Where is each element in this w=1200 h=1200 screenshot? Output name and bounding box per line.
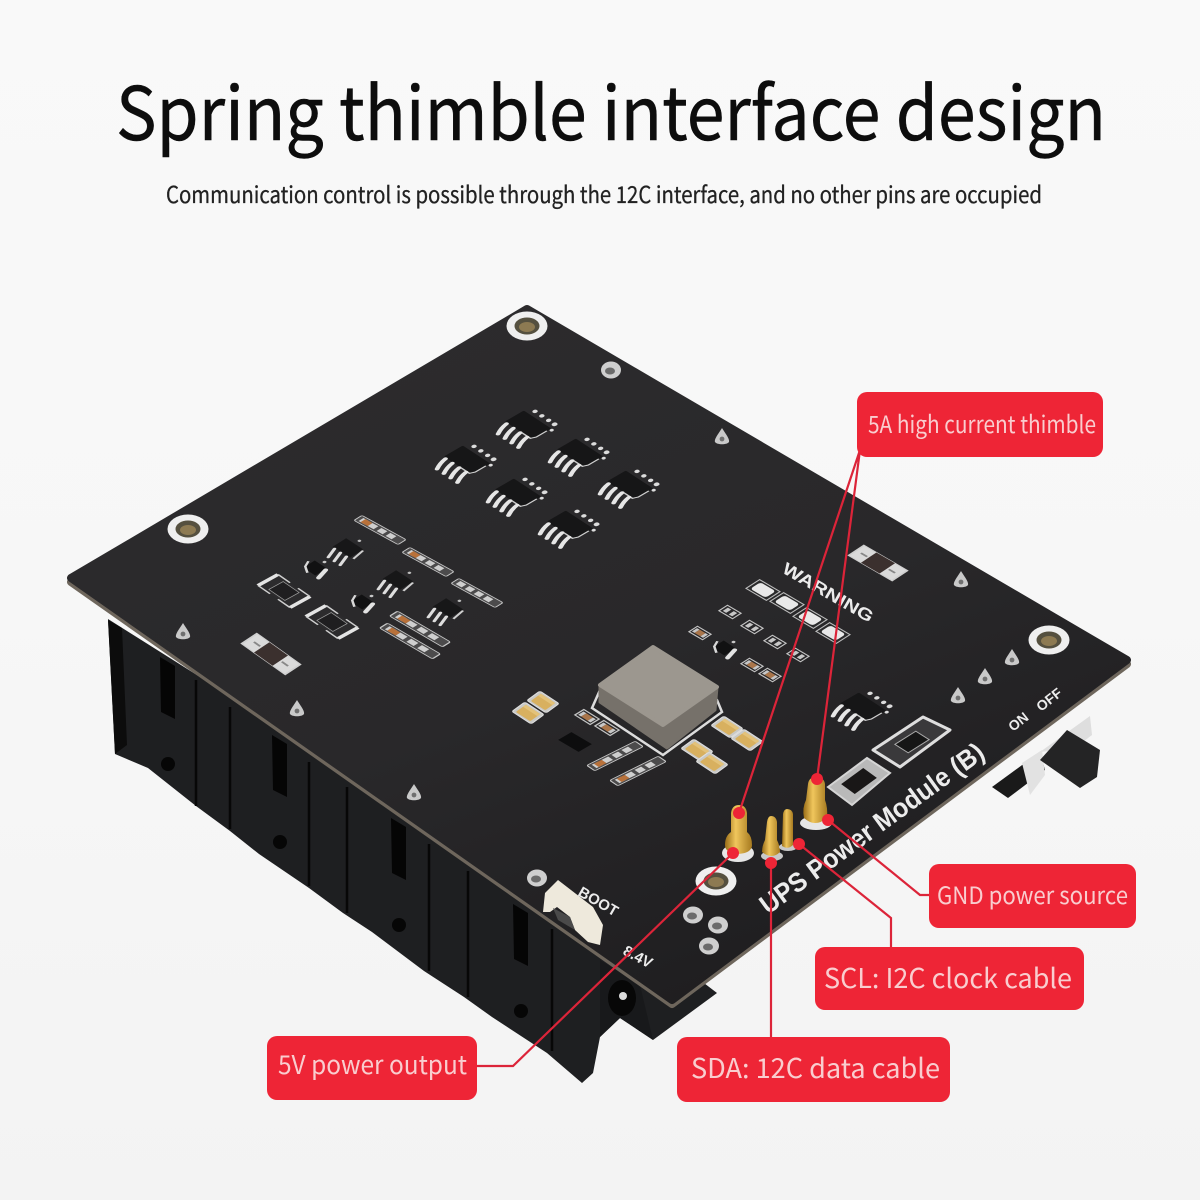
subtitle: Communication control is possible through the 12C interface, and no other pins are occupied	[166, 176, 1042, 210]
SOIC chip array	[430, 406, 897, 731]
callout: 5V power output: 5V power output	[278, 1045, 467, 1082]
warning footprints	[689, 545, 907, 682]
battery holder	[108, 619, 717, 1083]
left small components	[242, 515, 503, 675]
leader lines	[733, 450, 860, 819]
silkscreen labels: 8.4V	[620, 943, 655, 972]
inductor	[592, 647, 722, 755]
callout: SCL I2C clock cable	[793, 838, 1084, 1010]
mounting holes	[168, 312, 1070, 896]
solder points	[176, 362, 1019, 954]
callout: GND power source: GND power source	[937, 876, 1128, 911]
callout: 5A high current thimble: 5A high current thimble	[868, 405, 1096, 440]
silkscreen labels: ON	[1005, 709, 1031, 734]
silkscreen labels: UPS Power Module (B)	[754, 737, 990, 920]
silkscreen labels	[575, 559, 1065, 972]
callout: GND power source	[822, 814, 1136, 928]
DC power jack	[600, 960, 653, 1040]
callout: 5A high current thimble	[733, 392, 1103, 819]
product: UPS power module	[71, 309, 1127, 1083]
silkscreen labels: WARNING	[779, 559, 877, 626]
title: Spring thimble interface design	[116, 55, 1106, 162]
callout: SDA 12C data cable	[677, 857, 950, 1102]
silkscreen labels: BOOT	[575, 884, 621, 920]
capacitors and small parts near inductor	[512, 691, 763, 786]
callout: SDA 12C data cable: SDA: 12C data cable	[691, 1047, 940, 1086]
current sense resistors	[828, 717, 950, 805]
spring thimble pins	[722, 777, 832, 862]
circuit board	[71, 309, 1127, 1000]
BOOT button	[543, 880, 603, 945]
silkscreen labels: OFF	[1033, 684, 1065, 714]
callout: 5V power output	[267, 847, 739, 1100]
slide switch	[992, 716, 1100, 798]
callout: SCL I2C clock cable: SCL: I2C clock cable	[824, 957, 1072, 996]
board edge	[71, 313, 1127, 1004]
